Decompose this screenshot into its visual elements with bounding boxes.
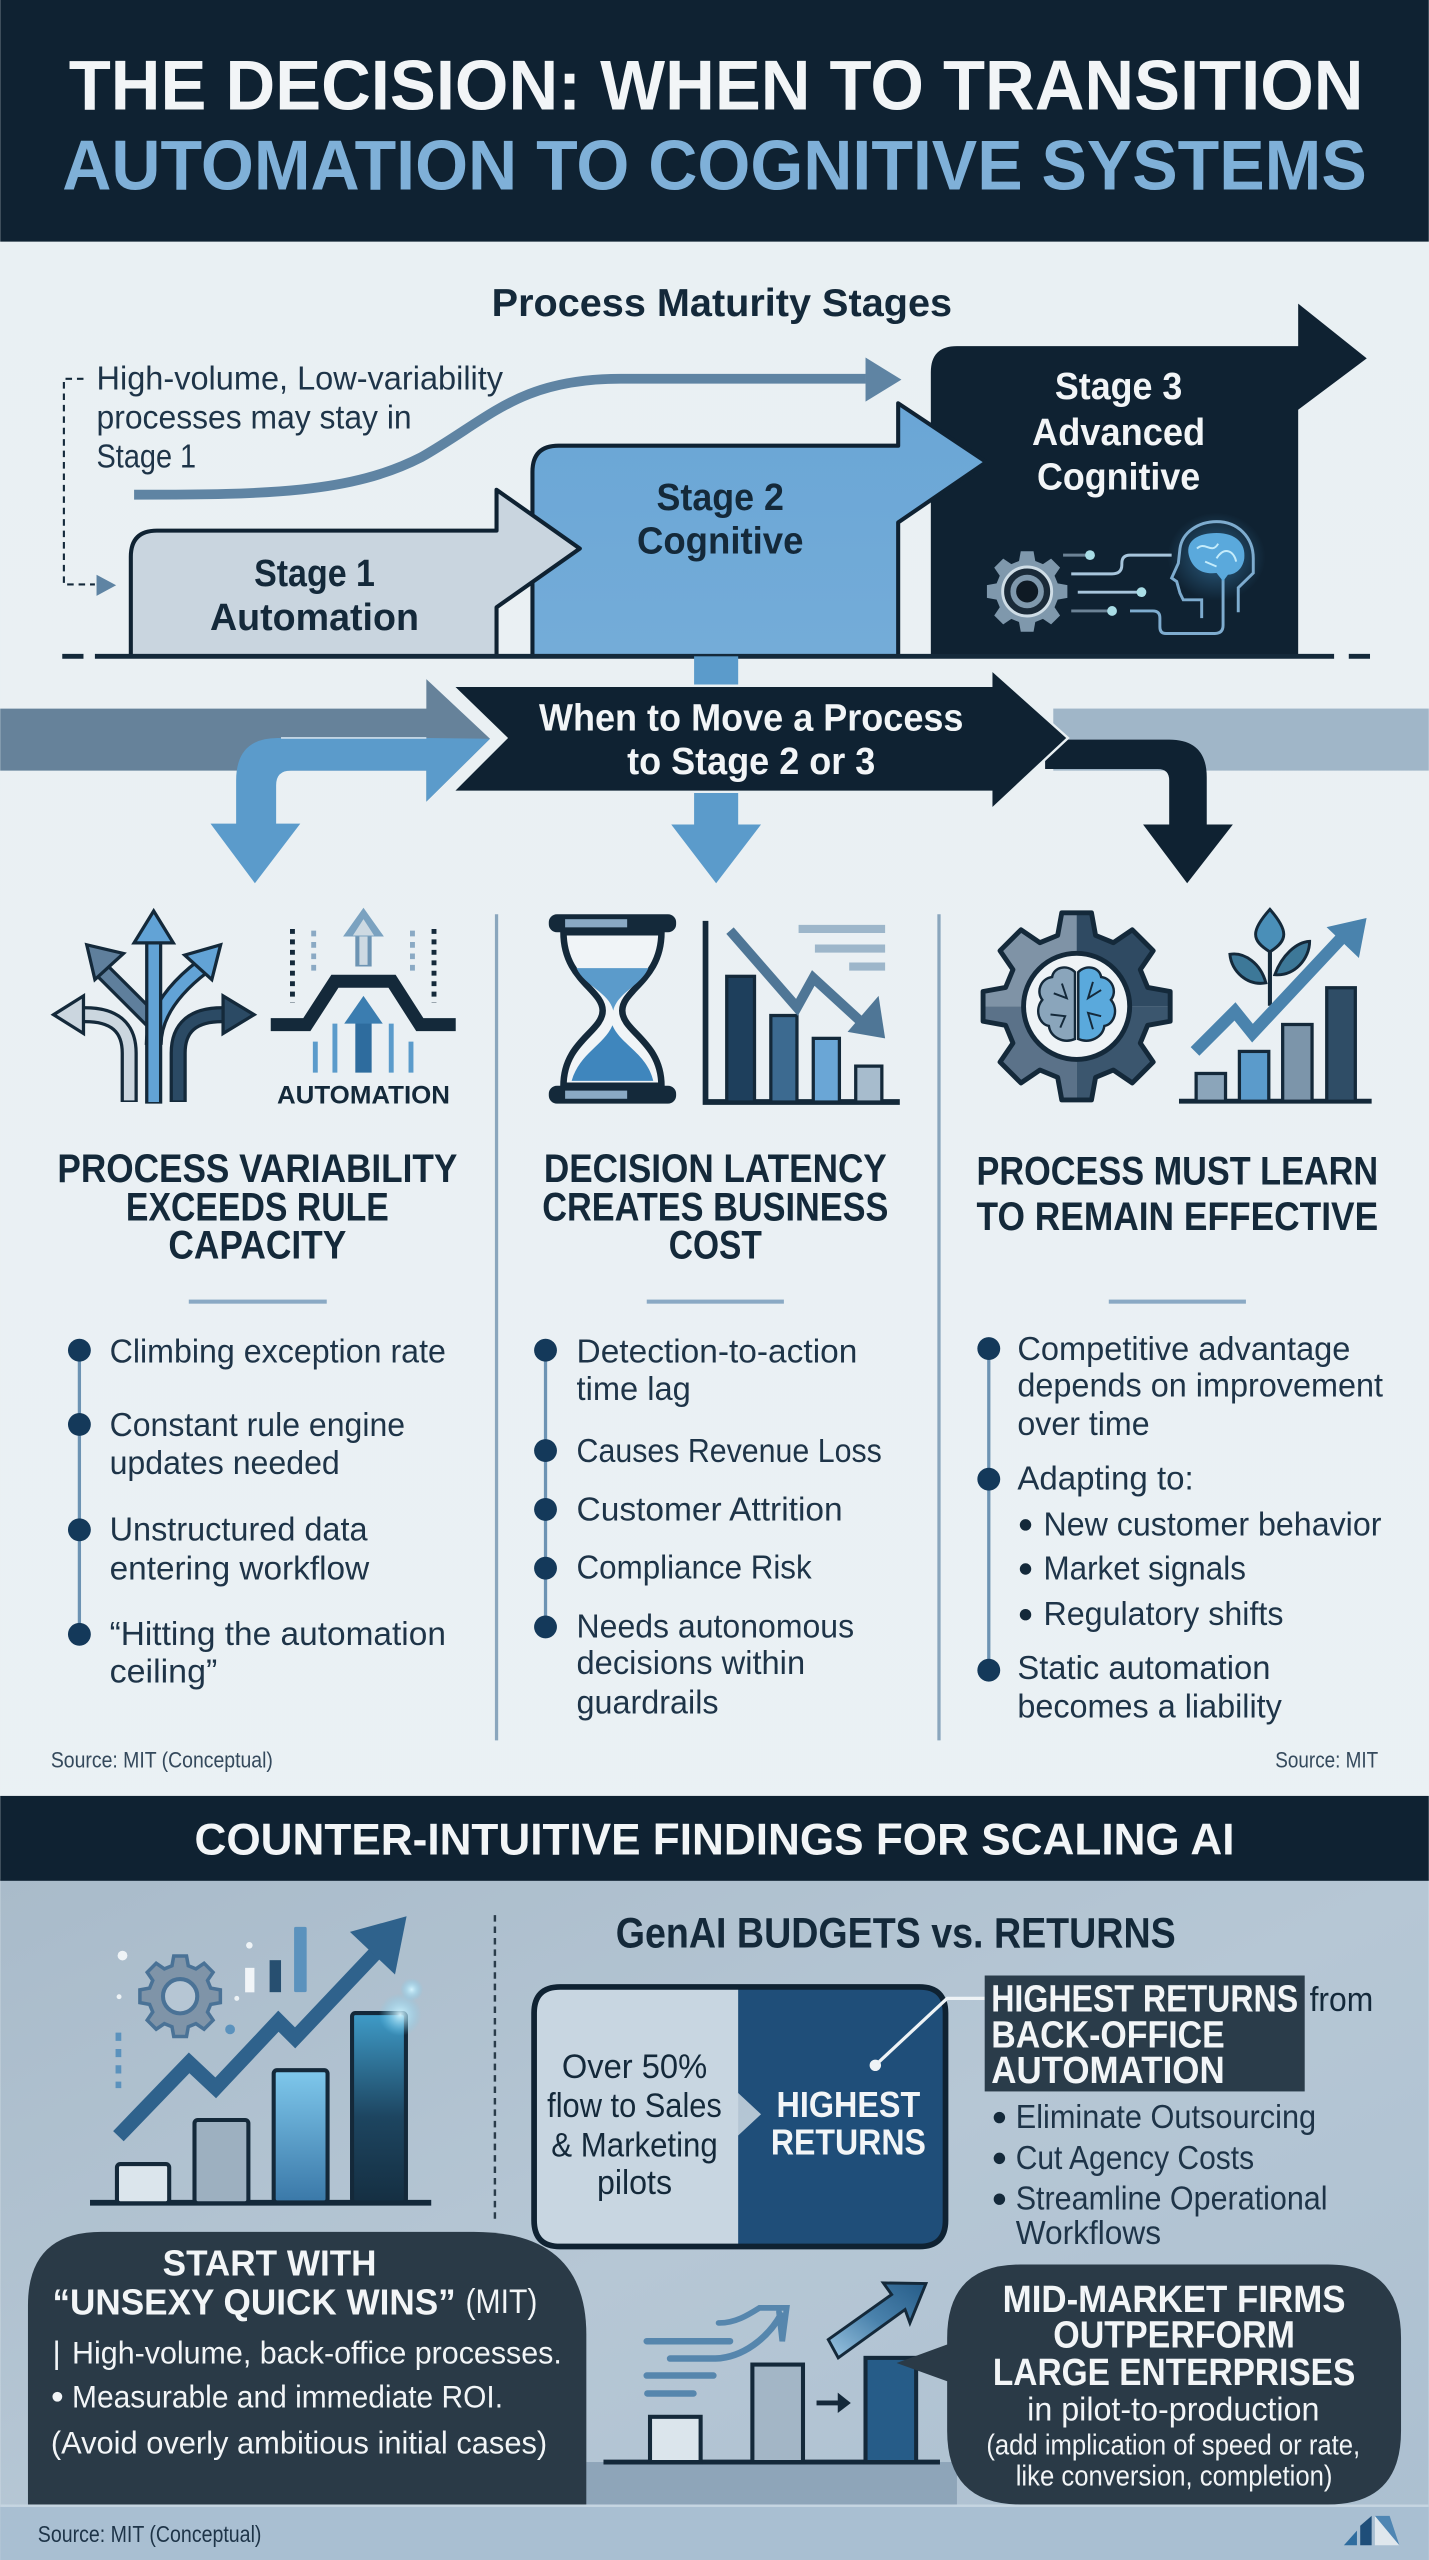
callout: highest returns: BACK-OFFICE xyxy=(991,2013,1225,2055)
panel: mid-market firms xyxy=(897,2264,1401,2504)
panel: quick wins: (Avoid overly ambitious initial cases) xyxy=(51,2424,547,2460)
list: decision latency: Needs autonomous xyxy=(577,1608,854,1645)
left cell text: pilots xyxy=(597,2164,672,2202)
stage 2 label: Stage 2 xyxy=(657,476,784,518)
list: process must learn: Market signals xyxy=(1043,1550,1246,1587)
lower section background xyxy=(0,1879,1429,2560)
stage 3 label xyxy=(1032,365,1205,498)
panel: quick wins: START WITH xyxy=(163,2242,377,2283)
list: process must learn: depends on improvement xyxy=(1017,1368,1384,1405)
title banner xyxy=(0,0,1429,242)
left cell text: flow to Sales xyxy=(547,2087,722,2125)
heading: decision latency: CREATES BUSINESS xyxy=(542,1185,888,1229)
panel: mid-market firms: like conversion, completion) xyxy=(1016,2461,1332,2493)
list: decision latency: Causes Revenue Loss xyxy=(577,1433,882,1470)
stage 3 label: Advanced xyxy=(1032,411,1205,453)
heading: process must learn xyxy=(977,1149,1378,1239)
list: decision latency: Detection-to-action xyxy=(577,1333,857,1370)
arrow: down left xyxy=(210,738,490,883)
panel: mid-market firms: LARGE ENTERPRISES xyxy=(993,2351,1355,2393)
callout: highest returns: AUTOMATION xyxy=(991,2049,1225,2091)
horizontal band right xyxy=(1053,709,1429,771)
chart: mid-market bars xyxy=(603,2283,940,2462)
list: process variability: Climbing exception rate xyxy=(110,1333,446,1370)
stage 1 label: Automation xyxy=(210,596,419,638)
right cell text xyxy=(771,2084,926,2163)
arrow: stage 3 xyxy=(931,304,1367,656)
heading: process must learn: TO REMAIN EFFECTIVE xyxy=(977,1195,1378,1239)
list: process variability: updates needed xyxy=(110,1445,340,1482)
stage 3 label: Stage 3 xyxy=(1055,365,1182,407)
note: high-volume processes xyxy=(97,360,503,476)
chart: growth bars xyxy=(90,1916,431,2203)
icon: growth chart with plant xyxy=(1179,909,1372,1101)
heading: decision latency xyxy=(542,1147,888,1268)
banner: when to move a process: to Stage 2 or 3 xyxy=(627,740,875,782)
banner: counter-intuitive findings xyxy=(0,1796,1429,1881)
list: decision latency: Customer Attrition xyxy=(577,1492,843,1529)
banner: counter-intuitive findings: COUNTER-INTUITIVE FINDINGS FOR SCALING AI xyxy=(195,1816,1234,1865)
panel: mid-market firms: MID-MARKET FIRMS xyxy=(1003,2278,1346,2320)
footer strip xyxy=(0,2504,1429,2560)
icon: automation ceiling xyxy=(271,908,456,1110)
list: decision latency: time lag xyxy=(577,1371,691,1408)
heading: process variability xyxy=(57,1147,458,1268)
list: process variability: “Hitting the automation xyxy=(110,1616,446,1653)
heading: decision latency: COST xyxy=(669,1224,762,1268)
arrow: stage 2 xyxy=(532,403,986,656)
list: back-office benefits: Eliminate Outsourcing xyxy=(1016,2099,1316,2136)
callout: highest returns xyxy=(870,1976,1373,2091)
list: back-office benefits: Streamline Operational xyxy=(1016,2181,1328,2218)
right cell text: RETURNS xyxy=(771,2122,926,2163)
heading: process variability: CAPACITY xyxy=(168,1224,347,1268)
list: process must learn: Static automation xyxy=(1017,1650,1270,1687)
panel: mid-market firms: (add implication of speed or rate, xyxy=(986,2430,1360,2462)
icon: logo xyxy=(1344,2516,1399,2545)
source footer: Source: MIT (Conceptual) xyxy=(38,2521,261,2547)
banner: when to move a process xyxy=(452,669,1068,810)
source right: Source: MIT xyxy=(1275,1747,1378,1772)
list: process must learn: becomes a liability xyxy=(1017,1688,1282,1725)
comparison box: budgets vs returns xyxy=(534,1987,946,2247)
baseline xyxy=(62,655,1370,658)
panel: quick wins xyxy=(28,2232,586,2504)
icon: diverging arrows xyxy=(54,911,254,1104)
heading: process variability: PROCESS VARIABILITY xyxy=(57,1147,458,1191)
note: high-volume processes: High-volume, Low-variability xyxy=(97,360,503,397)
icon: gear to brain xyxy=(987,513,1266,633)
list: process must learn xyxy=(977,1331,1384,1725)
panel: mid-market firms: in pilot-to-production xyxy=(1027,2391,1319,2428)
note: high-volume processes: Stage 1 xyxy=(97,439,196,476)
stage 2 label xyxy=(637,476,803,561)
title banner: THE DECISION: WHEN TO TRANSITION xyxy=(69,45,1363,124)
list: process must learn: Competitive advantage xyxy=(1017,1331,1350,1368)
panel: mid-market firms: OUTPERFORM xyxy=(1053,2314,1295,2356)
list: decision latency: Compliance Risk xyxy=(577,1550,812,1587)
stage 1 label xyxy=(210,552,419,638)
left cell text xyxy=(547,2048,722,2202)
list: decision latency xyxy=(534,1333,882,1721)
heading: process variability: EXCEEDS RULE xyxy=(126,1185,389,1229)
panel: quick wins: Measurable and immediate ROI. xyxy=(72,2379,503,2415)
banner: when to move a process: When to Move a Process xyxy=(539,697,963,739)
callout: highest returns: HIGHEST RETURNS xyxy=(991,1977,1298,2019)
arrow: down centre xyxy=(671,656,761,883)
stage staircase diagram xyxy=(131,304,1367,656)
list: back-office benefits: Cut Agency Costs xyxy=(1016,2140,1254,2177)
panel: quick wins: | xyxy=(52,2335,61,2371)
list: back-office benefits xyxy=(994,2099,1328,2252)
list: process must learn: New customer behavior xyxy=(1043,1506,1381,1543)
arrow: stage 1 xyxy=(131,490,580,656)
list: decision latency: decisions within xyxy=(577,1645,805,1682)
note: high-volume processes: processes may stay in xyxy=(97,399,412,436)
panel: quick wins: High-volume, back-office processes. xyxy=(72,2335,562,2371)
title banner: AUTOMATION TO COGNITIVE SYSTEMS xyxy=(62,125,1367,204)
arrow: down right xyxy=(1045,740,1233,883)
list: process variability: Constant rule engine xyxy=(110,1407,405,1444)
arrow: curved path to stage 3 level xyxy=(134,358,901,495)
icon: hourglass xyxy=(549,914,676,1104)
panel: quick wins: (MIT) xyxy=(466,2283,537,2321)
icon: gear with brain xyxy=(979,908,1175,1104)
heading: genai budgets: GenAI BUDGETS vs. RETURNS xyxy=(616,1910,1176,1957)
icon: declining bar chart xyxy=(706,921,900,1102)
list: back-office benefits: Workflows xyxy=(1016,2215,1161,2252)
stage 2 label: Cognitive xyxy=(637,519,803,561)
automation label: AUTOMATION xyxy=(277,1082,450,1110)
list: process must learn: Regulatory shifts xyxy=(1043,1596,1283,1633)
arrow: dashed return to stage 1 xyxy=(64,379,116,596)
callout: highest returns: from xyxy=(1310,1981,1373,2019)
arrow: into when-to-move band xyxy=(0,679,490,802)
list: process variability: Unstructured data xyxy=(110,1511,368,1548)
right cell text: HIGHEST xyxy=(777,2084,920,2125)
left cell text: Over 50% xyxy=(562,2048,707,2086)
panel: quick wins: “UNSEXY QUICK WINS” xyxy=(52,2282,456,2323)
source left: Source: MIT (Conceptual) xyxy=(51,1747,273,1772)
left cell text: & Marketing xyxy=(551,2126,718,2164)
stage 1 label: Stage 1 xyxy=(254,552,375,594)
list: process must learn: Adapting to: xyxy=(1017,1461,1194,1498)
heading: decision latency: DECISION LATENCY xyxy=(544,1147,887,1191)
darker floor strip under mid chart xyxy=(586,2462,957,2504)
list: process variability: entering workflow xyxy=(110,1550,370,1587)
list: process variability xyxy=(68,1333,446,1690)
list: decision latency: guardrails xyxy=(577,1684,719,1721)
list: process must learn: over time xyxy=(1017,1406,1150,1443)
stage 3 label: Cognitive xyxy=(1037,456,1200,498)
heading: process maturity stages: Process Maturity Stages xyxy=(492,282,952,325)
list: process variability: ceiling” xyxy=(110,1653,217,1690)
